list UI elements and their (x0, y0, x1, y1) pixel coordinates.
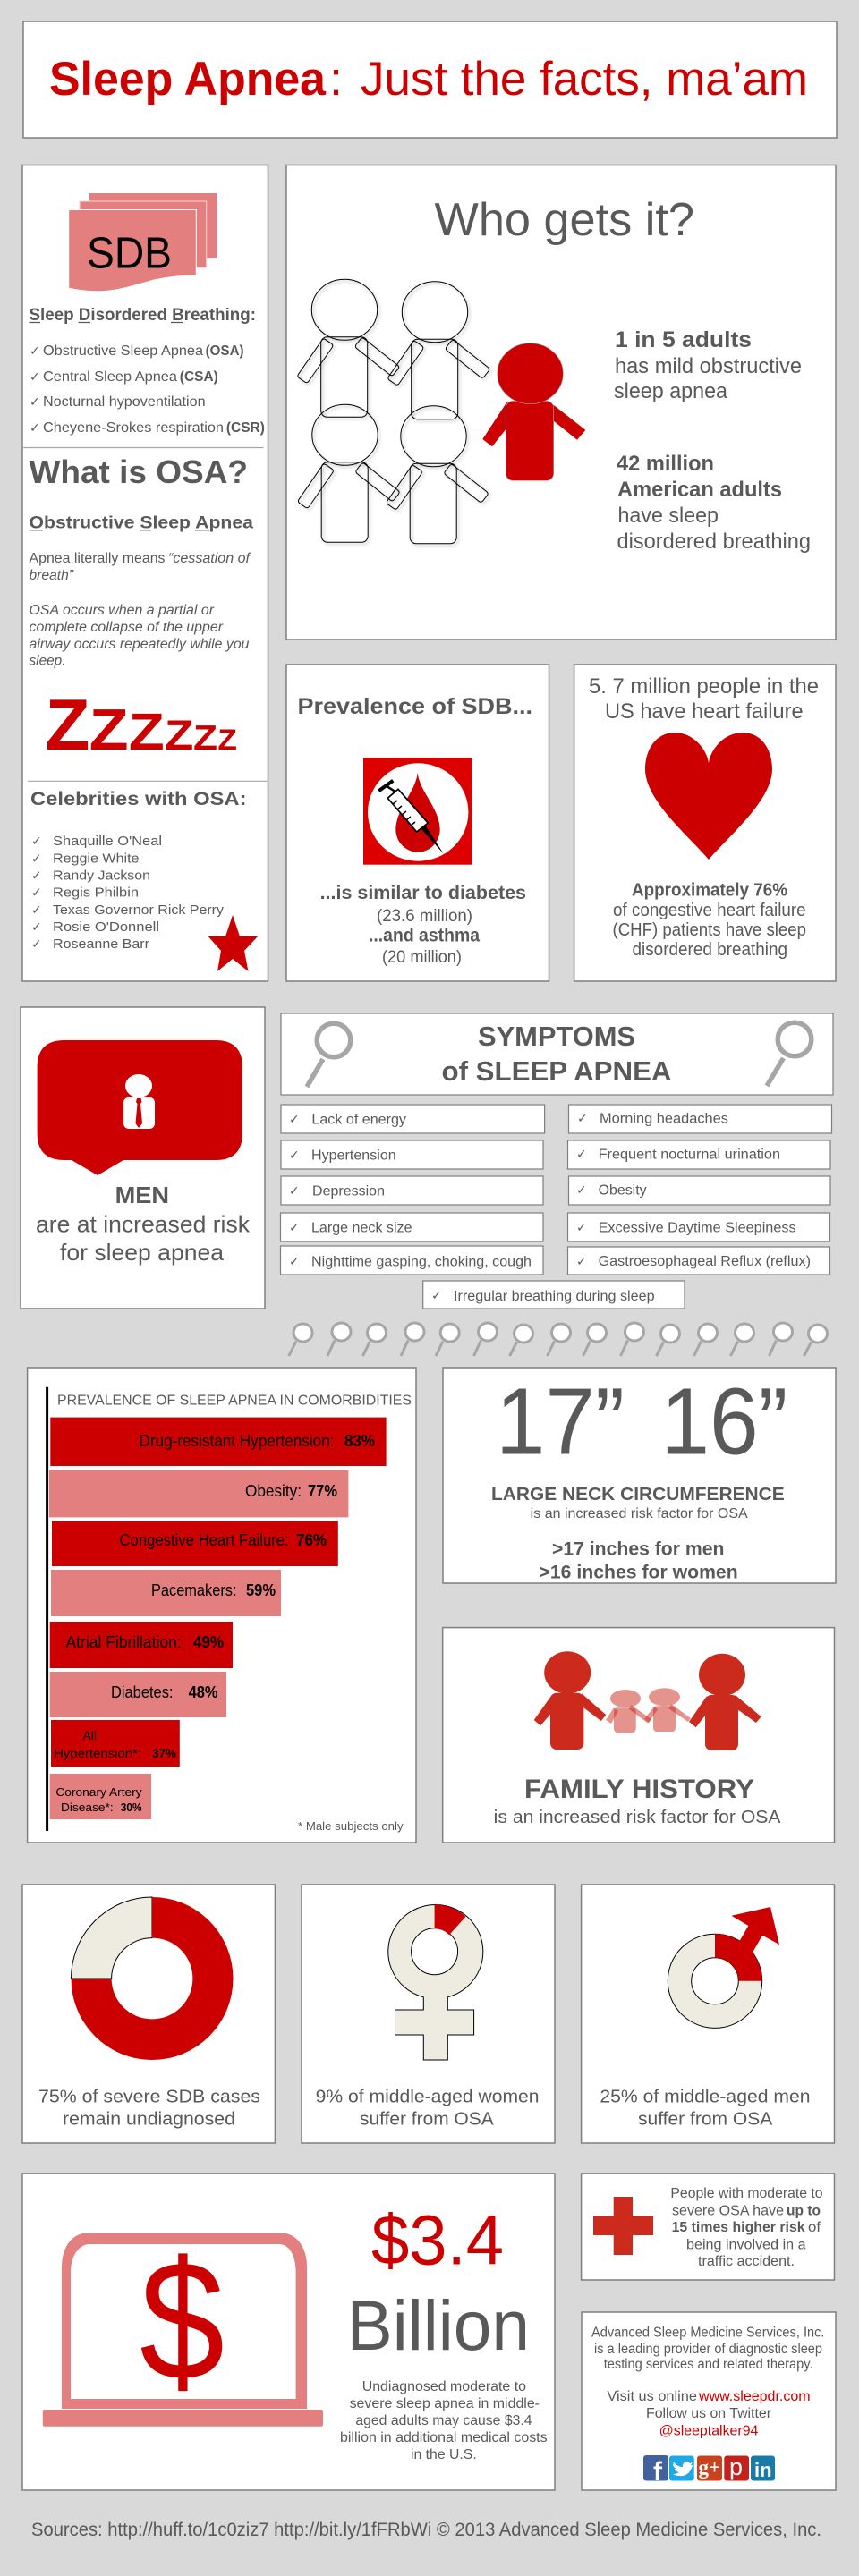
text: definition of apnea: “cessation of (168, 551, 251, 566)
list: types of SDB: Nocturnal hypoventilation (43, 394, 206, 410)
icon: outlined person 4 (386, 406, 489, 544)
panel: 3.4 billion cost (22, 2174, 555, 2490)
panel: 25 percent of men (582, 1885, 834, 2143)
bar: drug-resistant hypertension 83%: 83% (344, 1432, 375, 1450)
text: similar to diabetes and asthma: ...and asthma (369, 926, 480, 946)
text: traffic accident risk: traffic accident. (698, 2254, 795, 2269)
icon: left magnifying glass (307, 1023, 351, 1087)
bar: atrial fibrillation 49%: Atrial Fibrillation: (66, 1633, 182, 1651)
panel: symptoms header (281, 1013, 833, 1095)
text: about the company: testing services and related therapy. (604, 2357, 813, 2372)
text: contact links (607, 2389, 811, 2439)
stat: 42 million American adults: American adults (617, 478, 782, 502)
text: about the company: is a leading provider of diagnostic sleep (594, 2342, 822, 2357)
icon: outlined person 2 (387, 282, 490, 419)
symptom: nighttime gasping: Nighttime gasping, choking, cough (311, 1255, 532, 1270)
list: types of SDB: ✓ (30, 421, 40, 436)
icon: monitor with dollar sign: $ (140, 2226, 225, 2416)
symptom: obesity (569, 1176, 830, 1205)
list: celebrities: Texas Governor Rick Perry (53, 902, 225, 918)
symptom: excessive daytime sleepiness: ✓ (576, 1221, 587, 1235)
title banner: Just the facts, ma’am (361, 53, 808, 106)
title banner: Sleep Apnea (49, 53, 327, 106)
text: similar to diabetes and asthma: (23.6 million) (377, 907, 472, 926)
icon: Zzzzzz: Z (193, 719, 217, 758)
text: family history (494, 1775, 781, 1827)
bar: diabetes 48%: Diabetes: (111, 1683, 174, 1701)
icon: right magnifying glass (767, 1022, 812, 1086)
text: similar to diabetes and asthma: (20 million) (382, 948, 462, 967)
list: types of SDB: (CSR) (226, 420, 265, 436)
list: celebrities: Shaquille O'Neal (53, 834, 162, 849)
panel: 9 percent of women (302, 1885, 555, 2143)
text: 76 percent of CHF patients (612, 881, 806, 960)
symptom: large neck size: Large neck size (311, 1221, 412, 1236)
text: traffic accident risk: of (808, 2220, 821, 2235)
list: celebrities: ✓ (31, 937, 42, 952)
icon: blood drop and syringe (363, 758, 472, 865)
text: 76 percent of CHF patients: (CHF) patients have sleep (612, 920, 806, 940)
panel: heart failure (574, 665, 836, 981)
icon: monitor with dollar sign (43, 2226, 323, 2427)
big word: Billion: Billion (347, 2285, 530, 2365)
text: large neck circumference (491, 1485, 785, 1583)
list: celebrities: Rosie O'Donnell (53, 919, 159, 935)
text: family history: FAMILY HISTORY (524, 1775, 754, 1804)
title banner (23, 21, 837, 138)
list: symptoms (281, 1105, 832, 1309)
subheading: Obstructive Sleep Apnea: Obstructive Sleep Apnea (29, 513, 253, 533)
text: contact links: Follow us on Twitter (646, 2406, 771, 2421)
symptom: nighttime gasping (281, 1246, 543, 1275)
text: 75 percent undiagnosed: remain undiagnosed (63, 2109, 235, 2130)
list: types of SDB: ✓ (30, 370, 40, 385)
list: celebrities: ✓ (31, 835, 42, 849)
symptom: lack of energy: Lack of energy (311, 1113, 406, 1128)
text: about the company: Advanced Sleep Medicine Services, Inc. (591, 2326, 825, 2341)
symptom: nighttime gasping: ✓ (289, 1255, 300, 1269)
symptom: morning headaches: ✓ (577, 1112, 588, 1126)
heading: symptoms of sleep apnea: SYMPTOMS (478, 1021, 635, 1052)
stat: 1 in 5 adults (614, 327, 802, 403)
bar: drug-resistant hypertension 83%: Drug-resistant Hypertension: (140, 1432, 335, 1450)
text: traffic accident risk: severe OSA have (672, 2204, 784, 2219)
icon: SDB stacked papers: SDB (87, 229, 172, 277)
heading: Celebrities with OSA: Celebrities with OSA: (30, 788, 247, 809)
list: celebrities (31, 834, 225, 952)
list: types of SDB: Cheyene-Srokes respiration (43, 420, 224, 436)
stat: 42 million American adults: 42 million (617, 452, 714, 476)
list: types of SDB: ✓ (30, 395, 40, 410)
text: large neck circumference: LARGE NECK CIRCUMFERENCE (491, 1485, 785, 1504)
symptom: frequent nocturnal urination: Frequent nocturnal urination (599, 1148, 780, 1163)
text: 76 percent of CHF patients: of congestive heart failure (613, 901, 806, 920)
panel: family history (443, 1628, 834, 1843)
list: celebrities: Reggie White (53, 851, 140, 866)
text: contact links: www.sleepdr.com (698, 2389, 811, 2404)
panel: prevalence of SDB (286, 665, 549, 981)
bar: atrial fibrillation 49% (50, 1622, 233, 1668)
symptom: frequent nocturnal urination: ✓ (576, 1148, 587, 1162)
symptom: depression (281, 1176, 543, 1205)
panel: about and contact (582, 2312, 836, 2490)
bar: obesity 77%: Obesity: (245, 1482, 302, 1500)
text: traffic accident risk: People with moderate to (670, 2186, 823, 2201)
bar: congestive heart failure 76%: Congestive Heart Failure: (120, 1531, 289, 1549)
list: celebrities: ✓ (31, 852, 42, 866)
symptom: frequent nocturnal urination (567, 1140, 830, 1169)
text: men at increased risk: for sleep apnea (60, 1239, 225, 1266)
big numbers: 17 and 16 inches: 17” (496, 1369, 625, 1475)
icon: Zzzzzz (45, 685, 237, 766)
symptom: depression: ✓ (289, 1184, 300, 1199)
text: definition of apnea: OSA occurs when a partial or (29, 603, 215, 618)
bar: pacemakers 59% (51, 1570, 281, 1616)
symptom: lack of energy: ✓ (289, 1113, 300, 1127)
icons: social media (643, 2453, 775, 2487)
text: traffic accident risk: up to (787, 2204, 821, 2219)
heading: symptoms of sleep apnea (442, 1021, 671, 1087)
panel: who gets it (286, 165, 836, 640)
chart title: PREVALENCE OF SLEEP APNEA IN COMORBIDITIES (57, 1394, 412, 1409)
bar: pacemakers 59%: 59% (246, 1581, 276, 1599)
panel: sleep disordered breathing and what is OSA (22, 165, 268, 981)
icon: Zzzzzz: Z (165, 711, 193, 758)
text: 76 percent of CHF patients: Approximately 76% (632, 881, 787, 901)
list: types of SDB: ✓ (30, 344, 40, 359)
icons: social media: f (653, 2457, 663, 2487)
bar: all hypertension 37%: Hypertension*: (54, 1746, 141, 1760)
list: celebrities: Randy Jackson (53, 868, 150, 883)
symptom: excessive daytime sleepiness: Excessive Daytime Sleepiness (599, 1221, 796, 1236)
list: celebrities: ✓ (31, 920, 42, 935)
icon: SDB stacked papers (69, 193, 217, 292)
list: types of SDB: (CSA) (180, 369, 218, 385)
text: similar to diabetes and asthma: ...is similar to diabetes (320, 883, 526, 903)
symptom: large neck size (281, 1213, 543, 1241)
big numbers: 17 and 16 inches (496, 1369, 787, 1475)
decorative row of magnifying glasses (289, 1323, 827, 1356)
stat: 42 million American adults: have sleep (617, 504, 719, 528)
symptom: obesity: Obesity (599, 1183, 647, 1199)
icons: social media: in (754, 2459, 772, 2481)
big numbers: 17 and 16 inches: 16” (660, 1369, 787, 1475)
text: definition of apnea: sleep. (29, 653, 66, 669)
text: definition of apnea: complete collapse of the upper (29, 620, 224, 635)
stat: 42 million American adults: disordered breathing (617, 530, 811, 554)
panel: traffic accident risk (582, 2174, 834, 2280)
icon: Zzzzzz: Z (129, 703, 165, 761)
text: traffic accident risk (670, 2186, 823, 2269)
panel: 75 percent undiagnosed (22, 1885, 275, 2143)
text: additional costs: severe sleep apnea in middle- (350, 2396, 540, 2411)
symptom: gastroesophageal reflux: ✓ (576, 1255, 587, 1269)
icon: outlined person 3 (297, 404, 400, 542)
bar: all hypertension 37%: 37% (152, 1746, 177, 1760)
symptom: excessive daytime sleepiness (567, 1213, 830, 1241)
symptom: hypertension: Hypertension (311, 1148, 396, 1164)
symptom: irregular breathing: ✓ (431, 1289, 442, 1303)
icon: speech bubble with man (38, 1040, 242, 1175)
symptom: irregular breathing: Irregular breathing during sleep (454, 1289, 655, 1304)
text: 25 percent of men: 25% of middle-aged men (600, 2087, 811, 2107)
symptom: gastroesophageal reflux (567, 1247, 830, 1275)
icon: male symbol chart (668, 1907, 779, 2028)
list: celebrities: ✓ (31, 903, 42, 918)
symptom: lack of energy (281, 1105, 545, 1133)
text: 75 percent undiagnosed: 75% of severe SDB cases (38, 2087, 260, 2107)
bar: all hypertension 37% (51, 1720, 180, 1767)
big number: $3.4: $3.4 (371, 2200, 504, 2280)
footer: sources and copyright: Sources: http://huff.to/1c0ziz7 http://bit.ly/1fFRbWi © 2013 Advanced Sleep Medicine Services, Inc. (31, 2520, 821, 2540)
icon: family (534, 1651, 761, 1750)
text: men at increased risk (36, 1182, 251, 1266)
stat: 1 in 5 adults: has mild obstructive (615, 354, 802, 378)
text: about the company (591, 2326, 825, 2372)
heading: Prevalence of SDB: Prevalence of SDB... (297, 694, 532, 719)
list: types of SDB: Obstructive Sleep Apnea (43, 343, 203, 359)
panel: prevalence bar chart (28, 1368, 416, 1843)
bar: diabetes 48% (50, 1672, 226, 1717)
bar: drug-resistant hypertension 83% (50, 1418, 387, 1466)
donut chart: 75 percent (72, 1897, 234, 2060)
text: definition of apnea: airway occurs repeatedly while you (29, 637, 250, 652)
text: 5.7 million with heart failure (589, 674, 819, 724)
symptom: hypertension (281, 1140, 543, 1169)
text: additional costs: billion in additional medical costs (340, 2430, 548, 2445)
text: definition of apnea: Apnea literally means (29, 551, 166, 566)
icon: red cross (593, 2197, 653, 2255)
text: 76 percent of CHF patients: disordered breathing (632, 940, 787, 960)
text: 75 percent undiagnosed (38, 2087, 260, 2130)
icon: female symbol chart (388, 1904, 483, 2060)
icon: Zzzzzz: Z (45, 685, 89, 766)
icons: social media: g+ (698, 2456, 720, 2479)
text: definition of apnea (29, 551, 251, 669)
text: additional costs: in the U.S. (411, 2447, 477, 2462)
bar: coronary artery disease 30%: Disease*: (61, 1801, 114, 1814)
heading: symptoms of sleep apnea: of SLEEP APNEA (442, 1055, 671, 1087)
list: types of SDB: Central Sleep Apnea (43, 369, 177, 385)
list: celebrities: Regis Philbin (53, 886, 139, 901)
symptom: large neck size: ✓ (289, 1221, 300, 1235)
list: types of SDB (30, 343, 265, 436)
bar: congestive heart failure 76% (52, 1521, 338, 1566)
text: 5.7 million with heart failure: 5. 7 million people in the (589, 674, 819, 699)
bar: obesity 77%: 77% (308, 1482, 337, 1500)
panel: men at increased risk (21, 1007, 265, 1309)
symptom: irregular breathing (423, 1281, 685, 1309)
icon: Zzzzzz: Z (89, 698, 129, 762)
icon: red person (482, 343, 585, 480)
text: additional costs (340, 2379, 548, 2462)
icon: red star (208, 915, 258, 971)
text: traffic accident risk: 15 times higher risk (672, 2220, 805, 2235)
list: types of SDB: (OSA) (206, 343, 244, 359)
symptom: morning headaches: Morning headaches (600, 1112, 728, 1127)
heading: What is OSA: What is OSA? (29, 453, 248, 490)
bar: coronary artery disease 30%: 30% (121, 1801, 142, 1814)
bar: all hypertension 37%: All (82, 1728, 97, 1742)
text: large neck circumference: >16 inches for women (539, 1563, 738, 1583)
text: traffic accident risk: being involved in a (686, 2238, 806, 2253)
stat: 1 in 5 adults: sleep apnea (614, 379, 728, 403)
bar: obesity 77% (49, 1470, 348, 1517)
text: definition of apnea: breath” (29, 568, 74, 583)
text: contact links: @sleeptalker94 (659, 2424, 759, 2439)
heading: Who gets it: Who gets it? (435, 194, 694, 246)
symptom: morning headaches (569, 1105, 832, 1133)
symptom: hypertension: ✓ (289, 1148, 300, 1163)
heading: Sleep Disordered Breathing: Sleep Disordered Breathing: (29, 306, 256, 325)
text: 5.7 million with heart failure: US have heart failure (605, 699, 804, 724)
list: celebrities: ✓ (31, 869, 42, 883)
title banner: : (329, 53, 343, 106)
symptom: obesity: ✓ (576, 1183, 587, 1198)
text: family history: is an increased risk factor for OSA (494, 1808, 781, 1827)
text: 9 percent of women (316, 2087, 539, 2130)
footnote: male subjects only: * Male subjects only (298, 1819, 404, 1833)
bar: pacemakers 59%: Pacemakers: (151, 1581, 236, 1599)
panel: neck circumference (443, 1368, 836, 1583)
bar: congestive heart failure 76%: 76% (296, 1531, 327, 1549)
text: 25 percent of men: suffer from OSA (638, 2109, 773, 2130)
text: additional costs: aged adults may cause $3.4 (355, 2413, 532, 2428)
bar: diabetes 48%: 48% (189, 1683, 218, 1701)
text: large neck circumference: >17 inches for men (552, 1539, 724, 1560)
symptom: gastroesophageal reflux: Gastroesophageal Reflux (reflux) (599, 1254, 811, 1269)
bar: atrial fibrillation 49%: 49% (193, 1633, 224, 1651)
icon: outlined person 1 (297, 279, 400, 417)
text: 9 percent of women: 9% of middle-aged women (316, 2087, 539, 2107)
list: celebrities: ✓ (31, 886, 42, 901)
icon: Zzzzzz: Z (217, 724, 237, 756)
stat: 1 in 5 adults: 1 in 5 adults (615, 327, 752, 352)
icons: social media: p (729, 2453, 743, 2480)
text: men at increased risk: are at increased risk (36, 1211, 251, 1238)
text: additional costs: Undiagnosed moderate to (362, 2379, 526, 2394)
bar: coronary artery disease 30%: Coronary Artery (55, 1786, 142, 1799)
text: contact links: Visit us online (607, 2389, 697, 2404)
text: 9 percent of women: suffer from OSA (360, 2109, 494, 2130)
icon: heart (645, 733, 772, 860)
list: celebrities: Roseanne Barr (53, 936, 149, 952)
text: similar to diabetes and asthma (320, 883, 526, 967)
text: large neck circumference: is an increased risk factor for OSA (531, 1506, 748, 1521)
symptom: depression: Depression (312, 1184, 385, 1199)
stat: 42 million American adults (617, 452, 811, 554)
text: 25 percent of men (600, 2087, 811, 2130)
bar: coronary artery disease 30% (50, 1774, 151, 1819)
text: men at increased risk: MEN (115, 1182, 169, 1208)
